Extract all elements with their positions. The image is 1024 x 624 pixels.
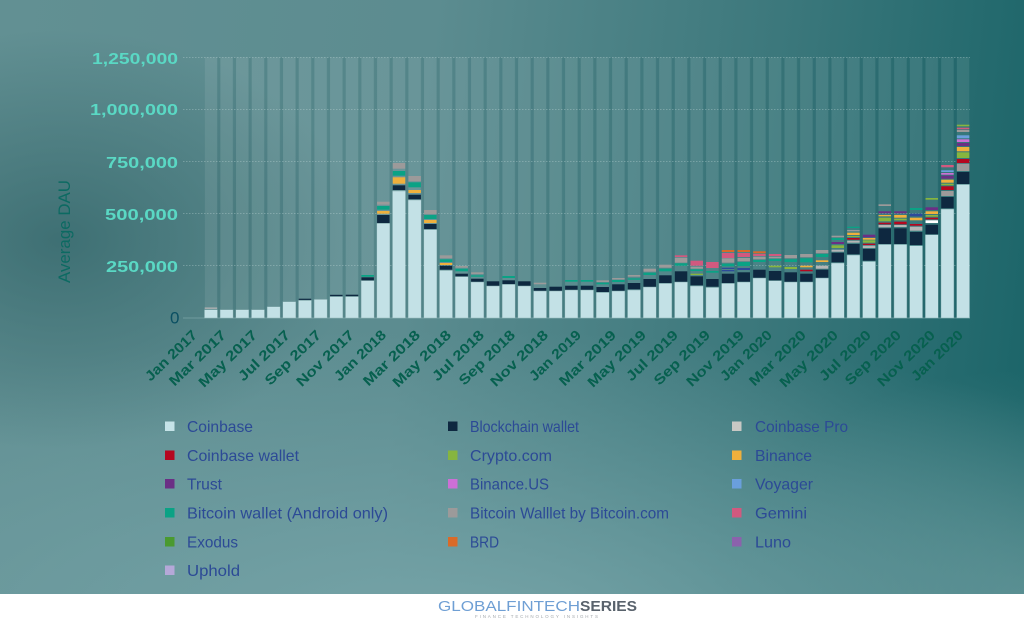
legend: Gemini — [755, 506, 807, 522]
legend: Trust — [187, 476, 223, 494]
x axis month labels: Mar 2017 — [165, 326, 229, 389]
stacked bars — [205, 125, 969, 318]
footer logo: Global Fintech Series: GLOBALFINTECH — [438, 598, 580, 615]
legend: Coinbase Pro — [755, 419, 848, 436]
x axis month labels: Jan 2019 — [525, 326, 584, 384]
x axis month labels: Jul 2019 — [622, 326, 681, 384]
legend: Luno — [755, 534, 791, 552]
y axis labels: 1,250,000 — [92, 51, 178, 68]
plot column background — [205, 57, 970, 318]
legend: Binance.US — [470, 476, 549, 494]
footer logo: Global Fintech Series: FINANCE TECHNOLOGY INSIGHTS — [475, 614, 598, 619]
x axis month labels: Mar 2018 — [359, 326, 423, 389]
y axis labels: 250,000 — [106, 259, 178, 276]
legend: Coinbase — [187, 419, 253, 436]
x axis month labels: Jan 2017 — [141, 326, 200, 384]
footer logo: Global Fintech Series — [438, 598, 637, 619]
legend: Bitcoin Walllet by Bitcoin.com — [470, 506, 669, 522]
x axis month labels: Mar 2020 — [745, 326, 809, 389]
legend: Bitcoin wallet (Android only) — [187, 506, 388, 522]
x axis month labels: May 2018 — [389, 326, 454, 390]
legend: Blockchain wallet — [470, 419, 579, 436]
x axis month labels — [141, 326, 966, 390]
x axis month labels: Mar 2019 — [555, 326, 619, 389]
x axis month labels: Jan 2020 — [716, 326, 775, 384]
x axis month labels: Jul 2020 — [815, 326, 874, 384]
x axis month labels: Jan 2020 — [907, 326, 966, 384]
chart: stacked bars of average DAU — [55, 51, 970, 390]
legend: Binance — [755, 448, 812, 465]
x axis month labels: Sep 2017 — [261, 326, 324, 388]
legend: Voyager — [755, 476, 814, 494]
y axis labels: 750,000 — [106, 155, 178, 172]
x axis month labels: Sep 2018 — [455, 326, 518, 388]
y axis labels: 0 — [170, 308, 179, 328]
y axis labels — [90, 51, 179, 328]
x axis month labels: Sep 2020 — [841, 326, 904, 388]
x axis month labels: Nov 2019 — [683, 326, 747, 390]
x axis month labels: Jan 2018 — [330, 326, 389, 384]
footer logo: Global Fintech Series: SERIES — [580, 598, 637, 615]
x axis month labels: May 2017 — [195, 326, 260, 390]
x axis month labels: Jul 2017 — [234, 326, 293, 384]
y axis labels: 500,000 — [105, 207, 178, 224]
x axis month labels: Nov 2018 — [487, 326, 551, 390]
legend — [165, 419, 848, 580]
legend: Exodus — [187, 534, 238, 552]
legend: Crypto.com — [470, 448, 552, 465]
x axis month labels: Nov 2020 — [874, 326, 938, 390]
x axis month labels: May 2020 — [776, 326, 841, 390]
y axis title: Average DAU — [55, 180, 74, 283]
legend: BRD — [470, 534, 499, 552]
y axis labels: 1,000,000 — [90, 102, 178, 119]
x axis month labels: Nov 2017 — [293, 326, 357, 390]
legend: Coinbase wallet — [187, 448, 300, 465]
x axis month labels: Jul 2018 — [428, 326, 487, 384]
legend: Uphold — [187, 563, 240, 580]
x axis month labels: Sep 2019 — [650, 326, 713, 388]
x axis month labels: May 2019 — [584, 326, 649, 390]
